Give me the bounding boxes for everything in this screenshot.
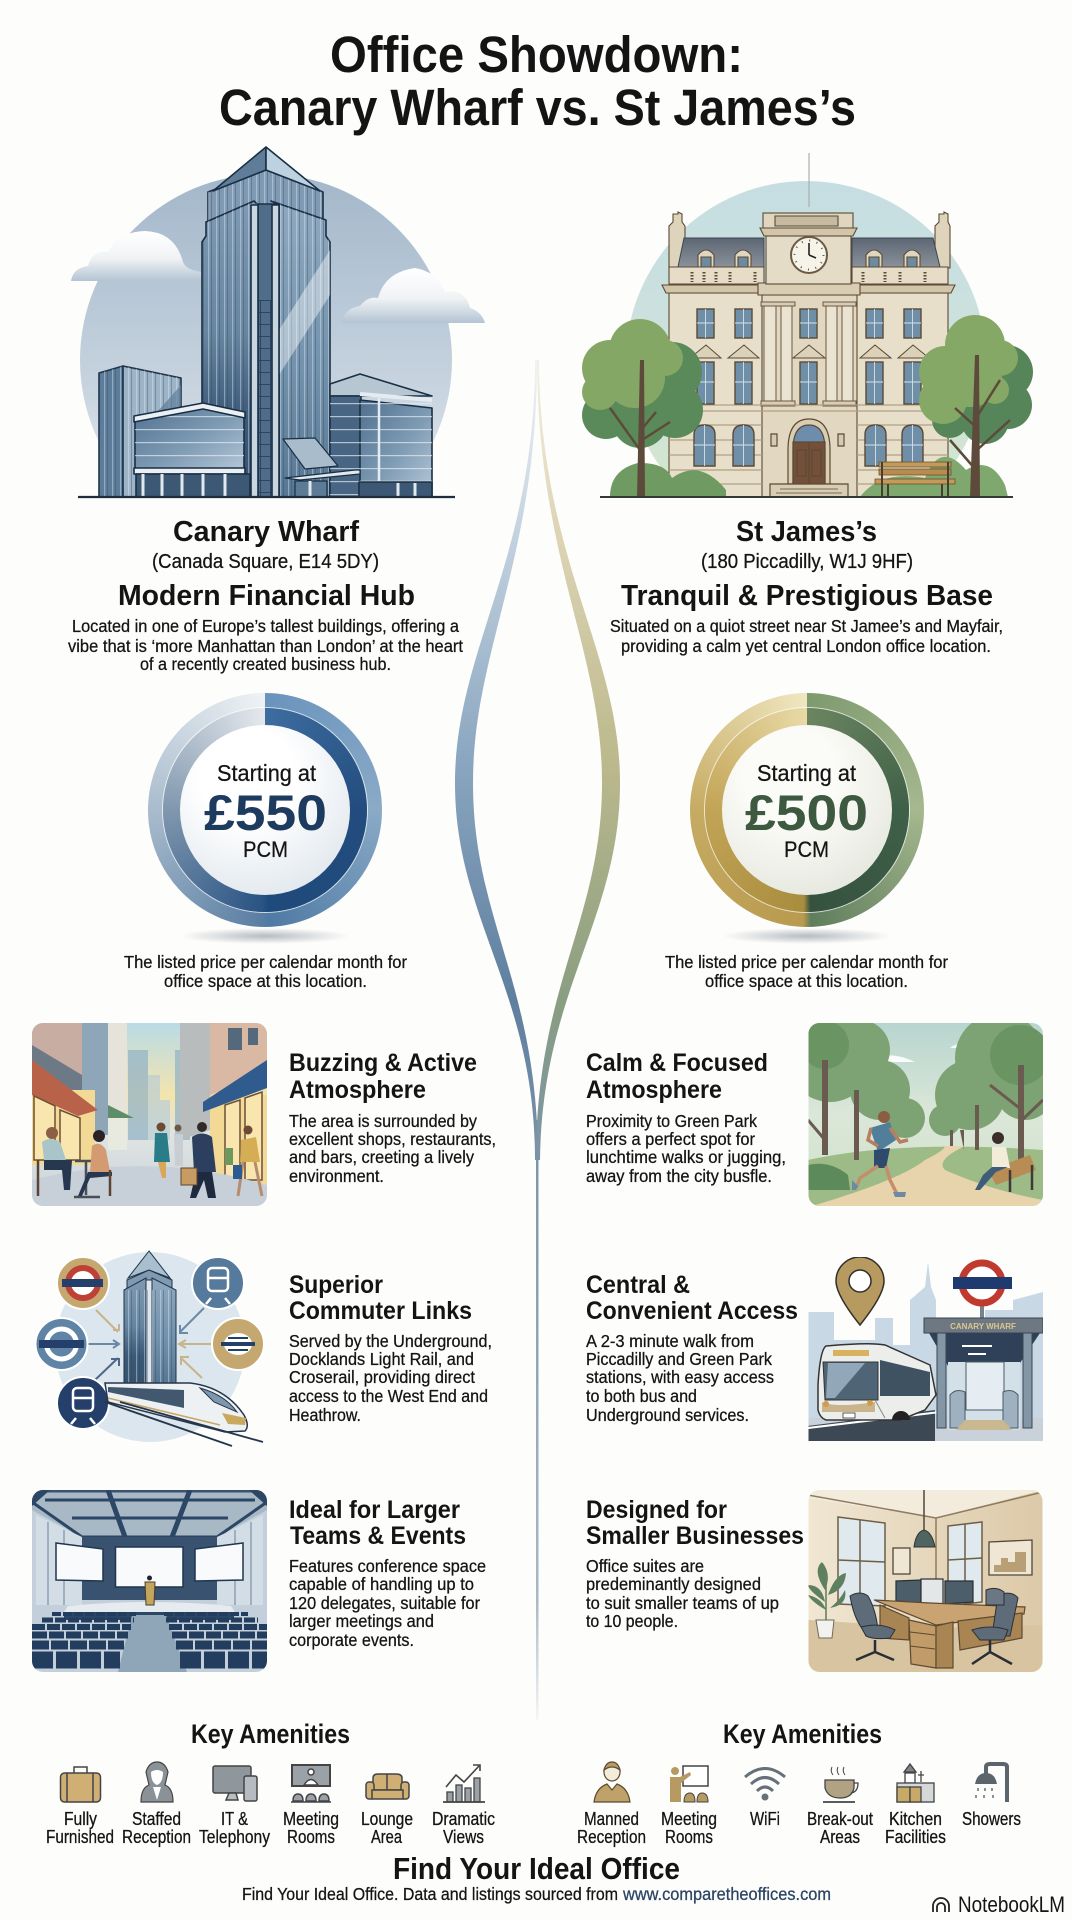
columns [761,302,856,406]
label: WiFi: WiFi [750,1809,780,1829]
label: Lounge Area: Area [371,1827,403,1847]
label: Staffed Reception: Staffed [132,1809,181,1829]
text: St James's description: Situated on a quiot street near St Jamee’s and Mayfair, [610,616,1003,636]
price note: Canary Wharf [124,952,407,991]
text: Superior Commuter Links: Docklands Light Rail, and [289,1349,474,1369]
label: Manned Reception: Manned [584,1809,639,1829]
label: Meeting Rooms: Meeting [283,1809,339,1829]
text: Designed for Smaller Businesses: to suit smaller teams of up [586,1593,779,1613]
label: Meeting Rooms [283,1809,339,1847]
label: Break-out Areas: Break-out [807,1809,873,1829]
price note: Canary Wharf: The listed price per calendar month for [124,952,407,972]
icon: kitchen [897,1764,934,1802]
price text: St James's: PCM [784,837,829,862]
text: Buzzing and Active Atmosphere [289,1049,496,1186]
text: Buzzing and Active Atmosphere: and bars, creeting a lively [289,1147,474,1167]
bench [875,462,955,497]
price note: St James's [665,952,948,991]
icon: video meeting [291,1765,331,1802]
underground sign [953,1263,1012,1318]
trees [808,1023,1043,1138]
windows [838,1517,982,1606]
bus [818,1344,936,1420]
bushes [610,457,1008,497]
text: Canary Wharf description [68,616,463,674]
header: Canary Wharf: Modern Financial Hub [118,580,415,612]
text: Central and Convenient Access: stations, with easy access [586,1367,774,1387]
header: Canary Wharf [118,516,415,612]
label: Showers: Showers [962,1809,1021,1829]
label: Meeting Rooms: Rooms [287,1827,335,1847]
text: Calm and Focused Atmosphere: away from the city busfle. [586,1166,772,1186]
tree right [919,315,1033,497]
windows [694,309,923,466]
text: Ideal for Larger Teams and Events: Features conference space [289,1556,486,1576]
text: Designed for Smaller Businesses: to 10 people. [586,1611,678,1631]
label: Manned Reception [577,1809,646,1847]
desk [874,1600,1025,1668]
text: Central and Convenient Access: Piccadilly and Green Park [586,1349,772,1369]
label: Dramatic Views [432,1809,495,1847]
window mullions [694,309,923,466]
icon: coffee cup [823,1767,858,1802]
ground line [78,496,455,498]
heading: Key Amenities right: Key Amenities [723,1719,882,1749]
footer source line: www.comparetheoffices.com [622,1884,831,1904]
illustration: small office [808,1490,1043,1672]
text: Superior Commuter Links: access to the West End and [289,1386,488,1406]
label: Kitchen Facilities: Facilities [885,1827,946,1847]
label: IT and Telephony [199,1809,270,1847]
text: Calm and Focused Atmosphere: offers a perfect spot for [586,1129,755,1149]
header: Canary Wharf: (Canada Square, E14 5DY) [152,551,379,573]
icon: sofa [366,1774,409,1799]
text: Calm and Focused Atmosphere [586,1049,786,1186]
price note: St James's: The listed price per calendar month for [665,952,948,972]
price text: Canary Wharf: PCM [243,837,288,862]
right buildings [180,1023,210,1140]
text: Ideal for Larger Teams and Events: capable of handling up to [289,1574,474,1594]
left buildings [32,1023,82,1075]
station entrance [924,1318,1043,1430]
text: Buzzing and Active Atmosphere: Atmosphere [289,1076,426,1104]
text: Central and Convenient Access: Convenient Access [586,1297,798,1325]
transit badges [36,1257,264,1429]
header: St James's [621,516,993,612]
text: Canary Wharf description: vibe that is ‘more Manhattan than London’ at the heart [68,636,463,656]
label: Meeting Rooms: Meeting [661,1809,717,1829]
title: Canary Wharf vs. St James’s [219,79,856,136]
plant [808,1562,846,1638]
icon: suitcase [60,1767,100,1802]
entrance canopy [283,438,360,497]
station entrance: CANARY WHARF [950,1322,1016,1331]
sky circle [80,178,452,442]
office chairs [850,1588,1018,1664]
low left block [99,366,181,497]
illustration: busy street [32,1023,267,1206]
seated woman on bench [975,1132,1036,1192]
header: Canary Wharf: Canary Wharf [173,516,359,548]
price note: Canary Wharf: office space at this location. [164,971,367,991]
lamps [771,434,844,446]
central divider: intertwined ribbons [455,360,620,1720]
facade [662,213,955,497]
price text: St James's [722,760,892,944]
text: Ideal for Larger Teams and Events: 120 delegates, suitable for [289,1593,480,1613]
right block [330,374,432,497]
sky circle [630,181,980,472]
text: Designed for Smaller Businesses: predeminantly designed [586,1574,761,1594]
audience seats [32,1614,267,1660]
icon: receptionist [141,1762,173,1802]
price text: St James's: £500 [745,785,868,841]
icon: manned reception [594,1762,630,1802]
chimneys [669,212,950,268]
illustration: St James's building [582,153,1033,498]
price text: Canary Wharf: Starting at [217,760,317,786]
icon: WiFi [745,1768,785,1800]
label: Meeting Rooms: Rooms [665,1827,713,1847]
amenities: Canary Wharf [46,1762,495,1847]
monitors [895,1578,974,1604]
text: Superior Commuter Links: Served by the Underground, [289,1331,492,1351]
text: Ideal for Larger Teams and Events [289,1496,486,1650]
icon: IT and telephony [213,1766,257,1801]
roundel icons [39,1268,255,1359]
text: Calm and Focused Atmosphere: Atmosphere [586,1076,722,1104]
footer source line: Find Your Ideal Office. Data and listings sourced from [242,1884,618,1904]
price text: Canary Wharf: £550 [204,785,327,841]
text: Buzzing and Active Atmosphere: excellent shops, restaurants, [289,1129,496,1149]
label: Kitchen Facilities: Kitchen [889,1809,942,1829]
icon: rising chart [443,1765,485,1802]
header: St James's: Tranquil & Prestigious Base [621,580,993,612]
main tower [202,147,330,497]
label: Manned Reception: Reception [577,1827,646,1847]
label: IT and Telephony: Telephony [199,1827,270,1847]
tower [124,1251,176,1383]
text: Designed for Smaller Businesses [586,1496,804,1631]
label: Break-out Areas: Areas [820,1827,860,1847]
label: Fully Furnished [46,1809,114,1847]
text: Ideal for Larger Teams and Events: Ideal for Larger [289,1496,460,1524]
label: Break-out Areas [807,1809,873,1847]
text: Calm and Focused Atmosphere: Calm & Focused [586,1049,768,1077]
price ring: St James's [690,693,924,927]
text: Buzzing and Active Atmosphere: Buzzing & Active [289,1049,477,1077]
cafe table and people [38,1127,112,1197]
label: Kitchen Facilities [885,1809,946,1847]
text: Calm and Focused Atmosphere: lunchtime walks or jugging, [586,1147,786,1167]
label: Fully Furnished: Furnished [46,1827,114,1847]
pendant lamp [914,1490,935,1547]
footer call to action: Find Your Ideal Office [393,1851,680,1886]
text: Ideal for Larger Teams and Events: Teams & Events [290,1522,466,1550]
label: Meeting Rooms [661,1809,717,1847]
antenna [808,153,810,207]
text: St James's description: providing a calm yet central London office location. [621,636,991,656]
text: Canary Wharf description: of a recently created business hub. [140,654,391,674]
text: Central and Convenient Access: Underground services. [586,1405,749,1425]
podium block [134,403,250,497]
cloud left [71,231,202,281]
screens [56,1543,243,1587]
door [770,419,848,497]
text: Superior Commuter Links: Commuter Links [289,1297,472,1325]
label: Fully Furnished: Fully [64,1809,97,1829]
text: Designed for Smaller Businesses: Office suites are [586,1556,704,1576]
illustration: Canary Wharf tower [71,146,485,498]
location pin [836,1257,884,1325]
illustration: transport links to the tower [36,1251,264,1446]
text: Buzzing and Active Atmosphere: environment. [289,1166,384,1186]
path [812,1146,1043,1206]
stone courses [669,405,948,484]
label: Dramatic Views: Dramatic [432,1809,495,1829]
train icons [71,1268,230,1424]
text: Superior Commuter Links [289,1271,492,1425]
text: Buzzing and Active Atmosphere: The area is surrounded by [289,1111,477,1131]
podium [145,1576,155,1605]
label: Lounge Area [361,1809,413,1847]
tree left [582,319,703,497]
text: Central and Convenient Access: Central & [586,1271,690,1299]
icon: presenter at board [670,1766,708,1802]
text: Ideal for Larger Teams and Events: larger meetings and [289,1611,434,1631]
price text: Canary Wharf [180,760,350,944]
clock [791,237,827,273]
arrows [88,1308,212,1380]
header: St James's: St James’s [736,516,877,548]
mansard roof [678,238,940,267]
cloud right [341,268,485,323]
text: Central and Convenient Access: A 2-3 minute walk from [586,1331,754,1351]
jogger [852,1111,908,1197]
text: Central and Convenient Access [586,1271,798,1425]
dormers [698,250,920,267]
title [219,26,856,136]
text: Superior Commuter Links: Superior [289,1271,383,1299]
label: IT and Telephony: IT & [221,1809,248,1829]
price ring: Canary Wharf [148,693,382,927]
pediments [690,345,929,358]
label: Staffed Reception: Reception [122,1827,191,1847]
text: Designed for Smaller Businesses: Designed for [586,1496,727,1524]
wall art [893,1540,1032,1575]
text: Designed for Smaller Businesses: Smaller Businesses [586,1522,804,1550]
amenities: St James's [577,1762,1021,1847]
label: Staffed Reception [122,1809,191,1847]
text: Ideal for Larger Teams and Events: corporate events. [289,1630,414,1650]
text: Calm and Focused Atmosphere: Proximity to Green Park [586,1111,757,1131]
title: Office Showdown: [330,26,743,83]
text: St James's description [610,616,1003,656]
icon: shower [975,1764,1007,1802]
text: Superior Commuter Links: Heathrow. [289,1405,361,1425]
text: Central and Convenient Access: to both bus and [586,1386,697,1406]
text: Canary Wharf description: Located in one of Europe’s tallest buildings, offering a [72,616,459,636]
high speed train [105,1383,263,1446]
price text: St James's: Starting at [757,760,857,786]
ground line [600,496,1013,498]
illustration: park with jogger [808,1023,1043,1206]
price note: St James's: office space at this location. [705,971,908,991]
illustration: conference room [32,1490,267,1672]
text: Superior Commuter Links: Croserail, providing direct [289,1367,475,1387]
label: Dramatic Views: Views [443,1827,484,1847]
header: St James's: (180 Piccadilly, W1J 9HF) [701,551,913,573]
illustration: bus and underground station [808,1257,1043,1441]
pavement [32,1166,267,1206]
label: Lounge Area: Lounge [361,1809,413,1829]
heading: Key Amenities left: Key Amenities [191,1719,350,1749]
